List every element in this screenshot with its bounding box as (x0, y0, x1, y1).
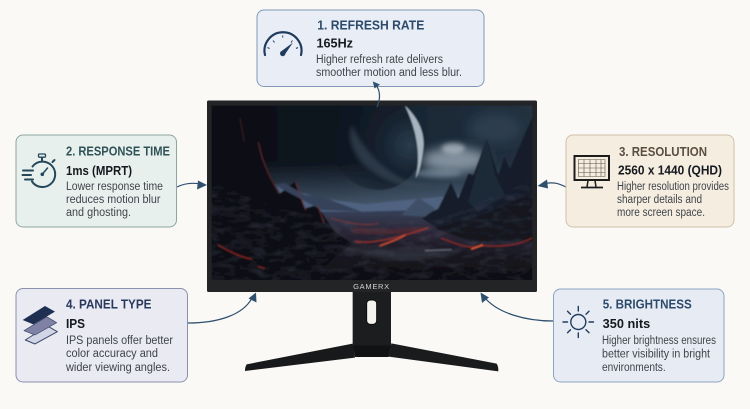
panel: refresh rate (257, 10, 484, 86)
description: reduces motion blur (66, 194, 161, 206)
description: wider viewing angles. (65, 362, 170, 374)
heading: 5. BRIGHTNESS (603, 297, 692, 312)
icon: sun (563, 306, 594, 338)
monitor screen: night landscape with planet (208, 100, 536, 283)
description: more screen space. (617, 207, 705, 219)
arrow: panel type (188, 292, 256, 323)
panel: brightness (554, 289, 724, 382)
value: 350 nits (603, 317, 650, 331)
description: color accuracy and (66, 348, 158, 360)
arrow: resolution (538, 180, 566, 188)
heading: 3. RESOLUTION (619, 144, 707, 159)
description: sharper details and (617, 194, 702, 206)
panel: panel type (16, 288, 188, 382)
arrow: refresh rate (373, 82, 380, 107)
description: IPS panels offer better (66, 335, 173, 347)
panel: resolution (566, 135, 734, 227)
icon: speedometer (264, 32, 301, 56)
icon: stopwatch (22, 154, 55, 187)
icon: monitor grid (574, 156, 609, 188)
description: environments. (602, 362, 666, 374)
icon: stacked layers (23, 306, 57, 344)
description: smoother motion and less blur. (316, 67, 462, 79)
monitor (207, 100, 537, 292)
heading: 4. PANEL TYPE (66, 297, 152, 312)
value: 165Hz (316, 36, 353, 50)
value: 1ms (MPRT) (66, 164, 132, 178)
description: Higher refresh rate delivers (316, 54, 443, 66)
monitor stand (245, 292, 498, 371)
arrow: response time (177, 180, 207, 190)
description: Higher brightness ensures (602, 335, 716, 347)
brand label: GAMERX (353, 282, 390, 291)
panel: response time (16, 135, 176, 227)
description: Lower response time (66, 181, 163, 193)
heading: 2. RESPONSE TIME (66, 144, 170, 159)
monitor bezel (207, 100, 537, 292)
description: Higher resolution provides (617, 181, 729, 193)
heading: 1. REFRESH RATE (317, 18, 425, 32)
description: and ghosting. (66, 207, 131, 219)
value: IPS (66, 317, 85, 331)
arrow: brightness (480, 292, 553, 321)
value: 2560 x 1440 (QHD) (618, 164, 722, 178)
description: better visibility in bright (602, 348, 711, 360)
